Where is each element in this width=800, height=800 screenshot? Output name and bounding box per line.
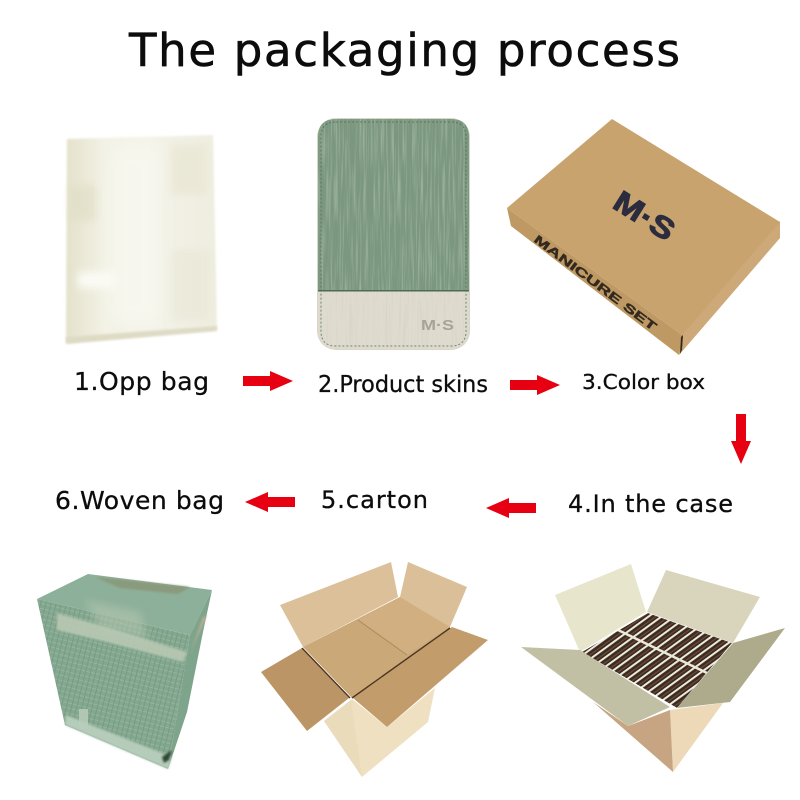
- skin: green panel: [318, 119, 469, 291]
- label 4: 4.In the case: [568, 490, 733, 518]
- label 2: 2.Product skins: [318, 372, 488, 398]
- case: packed sets: [582, 613, 732, 708]
- image: color box: [507, 119, 780, 355]
- carton: back left flap: [280, 562, 398, 647]
- arrow 1 to 2: [243, 371, 293, 391]
- skin: pale panel: [318, 291, 469, 349]
- image: open carton: [261, 562, 488, 777]
- box: top face: [507, 119, 780, 335]
- bag: top face: [37, 574, 212, 635]
- case: left flap: [521, 647, 670, 726]
- carton: right flap: [353, 627, 488, 727]
- arrow 4 to 5: [486, 498, 536, 518]
- skin logo: M·S: [421, 317, 454, 334]
- box logo: M·S: [607, 185, 681, 248]
- case: right flap: [677, 628, 785, 708]
- label 5: 5.carton: [321, 486, 428, 514]
- box: front side: [507, 208, 682, 355]
- box side label: MANICURE SET: [531, 232, 660, 334]
- case: back left flap: [555, 564, 646, 652]
- case: back right flap: [647, 570, 760, 643]
- image: product skin: [317, 118, 470, 350]
- carton: body: [324, 688, 435, 777]
- label 3: 3.Color box: [582, 370, 705, 394]
- image: filled carton: [521, 564, 785, 772]
- bag: front face: [37, 599, 190, 769]
- arrow 3 to 4: [731, 414, 751, 464]
- carton: inner flaps: [303, 597, 450, 698]
- arrow 5 to 6: [245, 492, 295, 512]
- box: right side: [679, 221, 780, 355]
- carton: back right flap: [400, 562, 467, 627]
- label 1: 1.Opp bag: [74, 367, 209, 396]
- label 6: 6.Woven bag: [55, 486, 224, 515]
- case: body: [670, 703, 723, 772]
- title: The packaging process: [128, 24, 680, 77]
- carton: left flap: [261, 648, 349, 731]
- image: opp bag: [66, 135, 217, 344]
- image: woven bag: [37, 574, 212, 769]
- arrow 2 to 3: [510, 375, 560, 395]
- bag: right face: [168, 590, 212, 769]
